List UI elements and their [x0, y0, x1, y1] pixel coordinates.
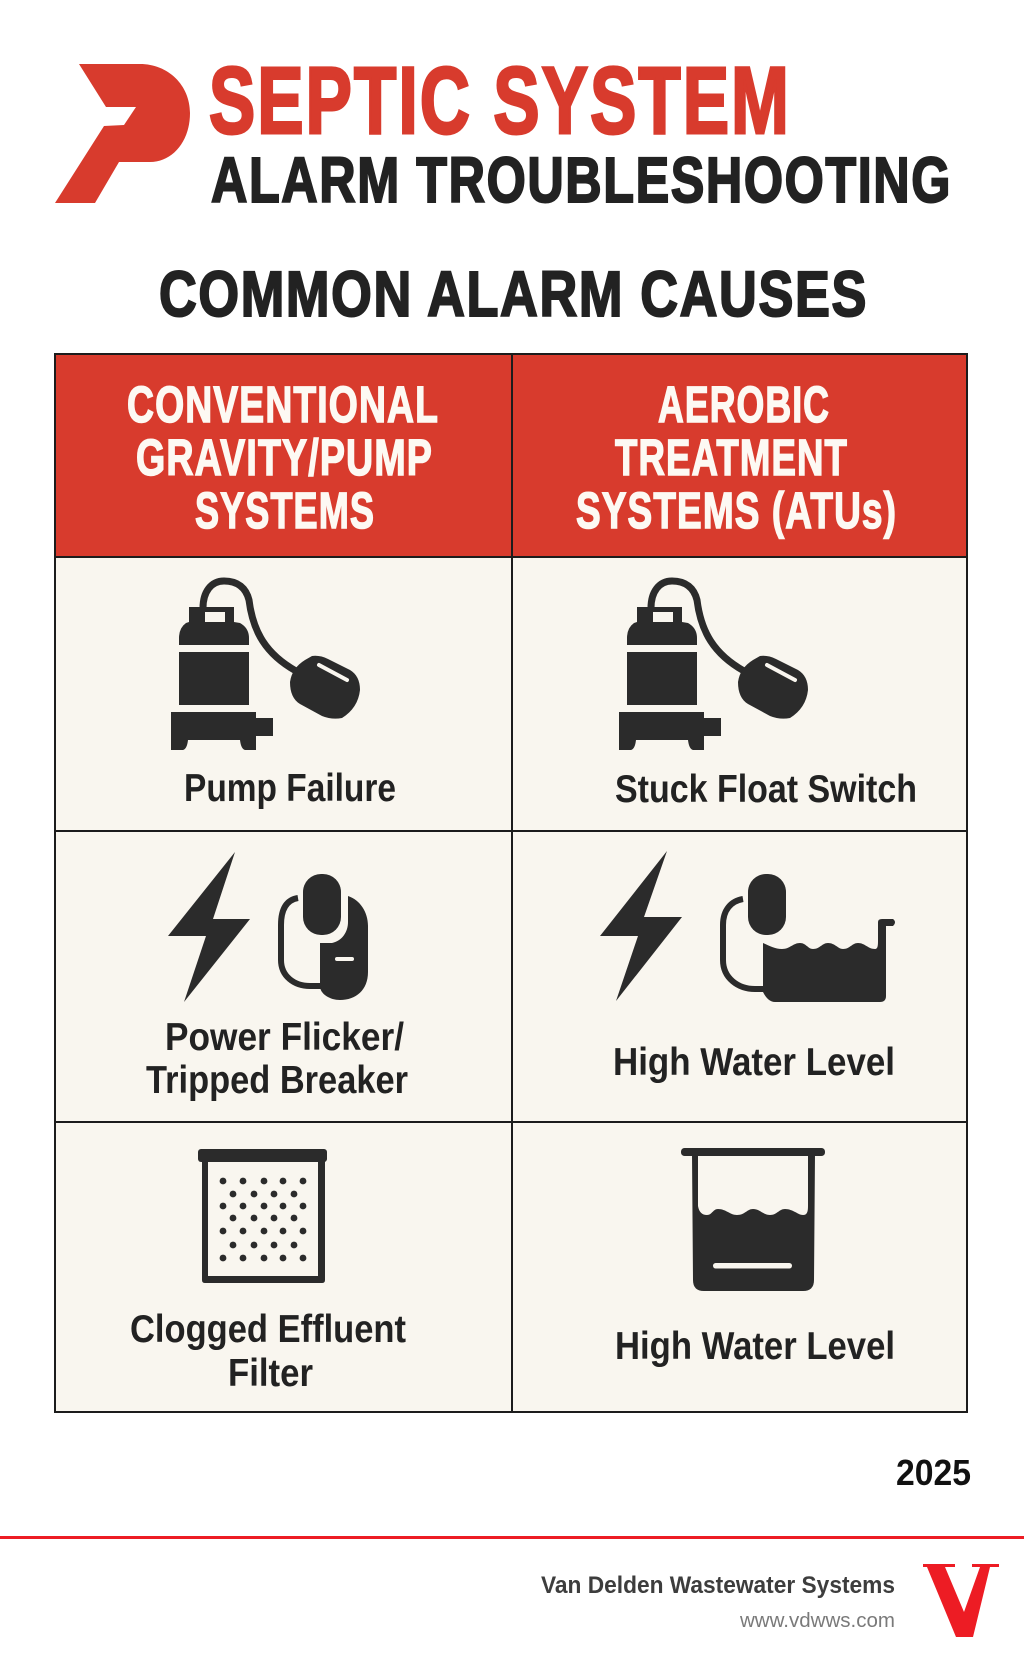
section heading: COMMON ALARM CAUSES [159, 258, 868, 330]
icon: beaker tank [681, 1148, 825, 1291]
cell: clogged effluent filter [55, 1122, 512, 1412]
label: stuck float switch: Stuck Float Switch [615, 768, 917, 811]
header: conventional systems: CONVENTIONAL [127, 376, 439, 433]
cell: high water level beaker [512, 1122, 967, 1412]
title line: septic system: SEPTIC SYSTEM [209, 48, 791, 154]
cell: high water level with float [512, 831, 967, 1122]
header: conventional systems [55, 354, 512, 557]
company name: Van Delden Wastewater Systems [541, 1572, 895, 1599]
label: clogged effluent filter: Clogged Effluent [130, 1308, 406, 1351]
footer company block [541, 1572, 895, 1632]
icon: lightning bolt [168, 852, 250, 1002]
header: conventional systems: SYSTEMS [195, 482, 375, 539]
icon: float and breaker [281, 874, 368, 1000]
causes table [55, 354, 967, 1412]
title [209, 48, 952, 216]
header: aerobic treatment systems [512, 354, 967, 557]
cell: power flicker [55, 831, 512, 1122]
icon: pump and float [171, 581, 360, 750]
label: pump failure: Pump Failure [184, 767, 396, 810]
company logo V [923, 1564, 999, 1637]
icon: filter [198, 1149, 327, 1283]
website: www.vdwws.com [739, 1609, 895, 1632]
header: aerobic treatment systems: AEROBIC [658, 376, 830, 433]
icon: pump and float [619, 581, 808, 750]
year: 2025 [896, 1452, 971, 1493]
label: high water level: High Water Level [615, 1325, 895, 1368]
footer divider [0, 1536, 1024, 1539]
icon: float and tank [723, 874, 895, 1002]
cell: stuck float switch [512, 557, 967, 831]
header: aerobic treatment systems: SYSTEMS (ATUs) [576, 482, 897, 539]
table grid lines [55, 354, 967, 1412]
logo mark [55, 64, 190, 203]
header: conventional systems: GRAVITY/PUMP [136, 429, 433, 486]
label: power flicker / tripped breaker: Power Flicker/ [165, 1016, 404, 1059]
cell: pump failure [55, 557, 512, 831]
label: power flicker / tripped breaker: Tripped Breaker [146, 1059, 408, 1102]
label: clogged effluent filter: Filter [228, 1352, 313, 1395]
label: high water level: High Water Level [613, 1041, 895, 1084]
label: power flicker / tripped breaker [146, 1016, 408, 1102]
icon: lightning bolt [600, 851, 682, 1001]
label: clogged effluent filter [130, 1308, 406, 1395]
header: aerobic treatment systems: TREATMENT [615, 429, 848, 486]
